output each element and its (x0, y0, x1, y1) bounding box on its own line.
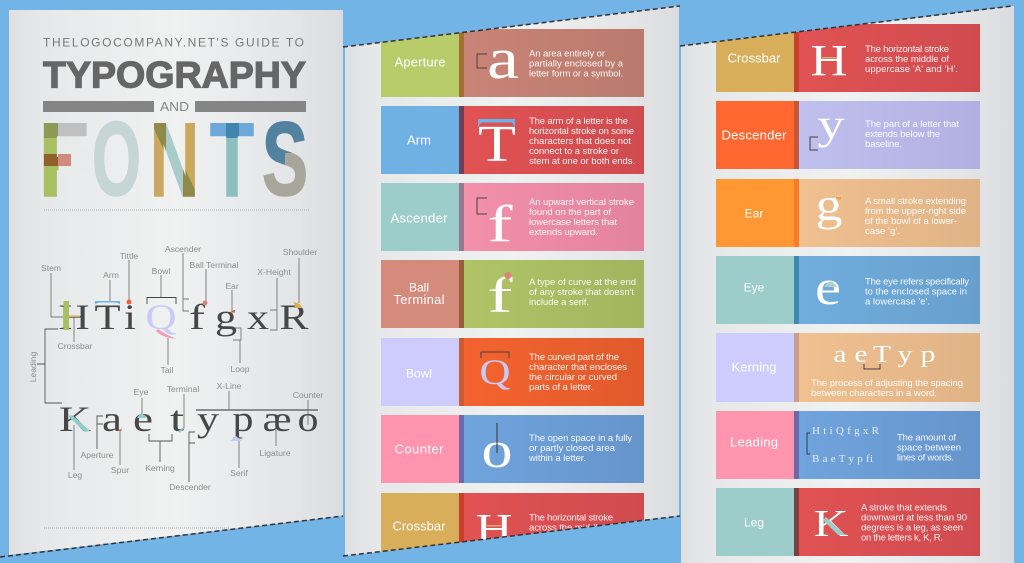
card: ascender: lowercase letters that (529, 217, 617, 228)
card: aperture: Aperture (394, 54, 446, 70)
heading: guide to: THELOGOCOMPANY.NET'S GUIDE TO (43, 36, 304, 50)
card: eye: Eye (744, 280, 765, 294)
card: ear: case 'g'. (865, 226, 900, 237)
card: kerning: The process of adjusting the spacing (811, 378, 963, 389)
card: bowl: character that encloses (529, 362, 627, 373)
card: ball terminal: f (488, 267, 513, 323)
heading: fonts multicolour: O (92, 101, 141, 218)
card: ball terminal: A type of curve at the end (529, 277, 636, 288)
diagram: letter anatomy first line: Q (146, 297, 176, 337)
card: leading: lines of words. (897, 452, 954, 464)
card: crossbar: H (810, 36, 848, 85)
card: ball terminal (381, 260, 644, 328)
card: kerning (716, 333, 980, 402)
card: arm (381, 106, 644, 174)
card: ear: of the bowl of a lower- (865, 216, 957, 227)
card: ball terminal: include a serif. (529, 297, 589, 308)
diagram: letter anatomy second line: K (59, 399, 91, 439)
diagram: letter anatomy second line: p (232, 399, 254, 439)
card: leg: A stroke that extends (861, 502, 947, 514)
card: kerning: a (834, 342, 847, 368)
panel: cover page (9, 10, 343, 555)
diagram: letter anatomy second line: y (197, 399, 219, 439)
labels: first line: X-Height (257, 267, 291, 277)
card: leading: space between (897, 442, 961, 454)
card: aperture: partially enclosed by a (529, 58, 624, 70)
labels: second line (68, 381, 323, 492)
card: leading: Leading (730, 434, 778, 450)
card: bowl: The curved part of the (529, 352, 619, 363)
diagram: letter anatomy first line: g (215, 297, 237, 337)
card: aperture: a (487, 26, 519, 91)
diagram: letter anatomy first line: x (247, 297, 269, 337)
diagram: letter anatomy second line: a (102, 399, 122, 439)
card: leg: downward at less than 90 (861, 512, 967, 524)
card: bowl: Bowl (406, 366, 432, 380)
card: eye: a lowercase 'e'. (865, 296, 930, 308)
labels: second line: Leg (68, 470, 82, 480)
card: aperture (381, 26, 644, 97)
labels: first line: Crossbar (58, 341, 93, 351)
card: leading: B a e T y p fi (812, 453, 873, 465)
labels: first line: Stem (41, 263, 61, 273)
card: crossbar, cut off (381, 493, 644, 552)
card: eye (716, 256, 980, 324)
card: crossbar, cut off: The horizontal stroke (529, 512, 613, 524)
card: kerning: p (920, 342, 936, 368)
card: bowl: the circular or curved (529, 372, 617, 383)
card: kerning: between characters in a word. (811, 388, 937, 399)
card: bowl: parts of a letter. (529, 382, 593, 393)
card: bowl (381, 338, 644, 406)
labels: second line: Aperture (81, 450, 114, 460)
card: ball terminal: Terminal (394, 292, 445, 307)
card: crossbar, cut off: H (476, 505, 512, 554)
diagram: letter anatomy first line (37, 253, 308, 403)
panel: glossary column two (345, 6, 679, 561)
card: arm: Arm (407, 132, 431, 148)
card: descender: y (818, 102, 844, 148)
panel: glossary column three (681, 6, 1014, 563)
card: counter: The open space in a fully (529, 433, 632, 444)
heading: and with bars: AND (160, 99, 189, 114)
card: arm: T (478, 116, 516, 173)
card: ascender: Ascender (390, 210, 448, 226)
card: ascender: found on the part of (529, 207, 611, 218)
labels: second line: Ligature (259, 448, 291, 458)
heading: fonts multicolour: N (150, 102, 199, 219)
card: counter: within a letter. (528, 453, 586, 464)
labels: second line: Eye (134, 387, 149, 397)
labels: second line: Counter (293, 390, 323, 400)
card: leg: on the letters k, K, R. (861, 532, 943, 544)
heading: and with bars (43, 99, 306, 114)
card: counter: Counter (394, 442, 444, 456)
card: leading: The amount of (897, 432, 956, 444)
heading: fonts multicolour: S (262, 101, 308, 218)
card: crossbar: uppercase 'A' and 'H'. (865, 64, 958, 75)
card: arm: characters that does not (529, 136, 631, 147)
card: crossbar (716, 24, 980, 92)
diagram: letter anatomy first line: R (280, 297, 308, 337)
card: ascender (381, 183, 644, 253)
labels: first line: Ascender (165, 244, 201, 254)
card: ear: A small stroke extending (865, 196, 966, 207)
card: kerning: e (854, 342, 868, 368)
card: crossbar, cut off: Crossbar (392, 518, 446, 534)
card: arm: connect to a stroke or (529, 146, 619, 157)
card: arm: horizontal stroke on some (529, 126, 634, 137)
card: eye: to the enclosed space in (865, 286, 967, 298)
card: ball terminal: Ball (409, 280, 429, 294)
card: crossbar: Crossbar (728, 50, 781, 66)
card: ascender: f (488, 196, 513, 253)
diagram: letter anatomy first line: i (124, 297, 136, 337)
card: leg (716, 488, 980, 556)
card: arm: stem at one or both ends. (529, 156, 635, 167)
heading: typography: TYPOGRAPHY (43, 54, 306, 96)
card: arm: The arm of a letter is the (529, 116, 628, 127)
heading: fonts multicolour: F (39, 102, 89, 219)
card: leading (716, 411, 980, 479)
diagram: letter anatomy first line: T (94, 297, 120, 337)
card: counter: or partly closed area (529, 443, 616, 454)
card: ear: Ear (745, 206, 763, 220)
card: descender: baseline. (865, 139, 902, 150)
diagram: letter anatomy first line: f (189, 297, 205, 337)
diagram: letter anatomy second line: o (298, 399, 318, 439)
card: descender (716, 101, 980, 169)
card: crossbar: across the middle of (865, 54, 949, 65)
card: counter (381, 415, 644, 483)
diagram: letter anatomy first line: H (58, 297, 90, 337)
labels: first line: Ear (225, 281, 239, 291)
labels: first line: Tail (161, 365, 174, 375)
card: ear: from the upper-right side (865, 206, 966, 217)
card: leading: H t i Q f g x R (812, 425, 880, 437)
card: bowl: Q (480, 352, 510, 392)
card: counter: o (482, 422, 512, 479)
card: descender: extends below the (865, 129, 940, 140)
card: aperture: An area entirely or (529, 48, 605, 60)
labels: first line: Bowl (152, 266, 170, 276)
labels: first line: Arm (103, 270, 119, 280)
card: aperture: letter form or a symbol. (529, 68, 623, 80)
card: descender: Descender (722, 128, 787, 142)
labels: first line: Loop (230, 364, 250, 374)
card: crossbar: The horizontal stroke (865, 44, 949, 55)
card: ear (716, 179, 980, 247)
labels: second line: Kerning (145, 463, 175, 473)
labels: second line: Spur (111, 465, 129, 475)
labels: first line: Tittle (120, 251, 138, 261)
card: leg: K (814, 503, 849, 545)
labels: second line: Serif (230, 468, 248, 478)
card: ear: g (816, 179, 842, 230)
diagram: letter anatomy second line: t (170, 399, 184, 439)
heading: fonts multicolour (39, 101, 308, 219)
card: eye: The eye refers specifically (865, 276, 969, 288)
diagram: letter anatomy second line: æ (262, 399, 292, 439)
card: ascender: An upward vertical stroke (529, 197, 634, 208)
diagram: letter anatomy second line (59, 391, 318, 482)
card: kerning: T (873, 342, 891, 368)
card: ball terminal: of any stroke that doesn't (529, 287, 634, 298)
diagram: letter anatomy second line: e (133, 399, 153, 439)
labels: first line: Ball Terminal (189, 260, 239, 270)
labels: second line: X-Line (217, 381, 242, 391)
card: eye: e (815, 259, 841, 315)
heading: fonts multicolour: T (210, 102, 254, 219)
card: ascender: extends upward. (529, 227, 598, 238)
labels: second line: Descender (169, 482, 211, 492)
card: crossbar, cut off: across the middle of (529, 522, 613, 534)
card: leg: degrees is a leg, as seen (861, 522, 963, 534)
labels: second line: Terminal (167, 384, 199, 394)
labels: first line (28, 244, 317, 382)
card: kerning: y (898, 342, 912, 368)
labels: first line: Shoulder (283, 247, 317, 257)
card: kerning: Kerning (732, 360, 776, 374)
labels: first line: Leading (28, 351, 38, 382)
card: leg: Leg (744, 516, 764, 530)
card: descender: The part of a letter that (865, 119, 959, 130)
